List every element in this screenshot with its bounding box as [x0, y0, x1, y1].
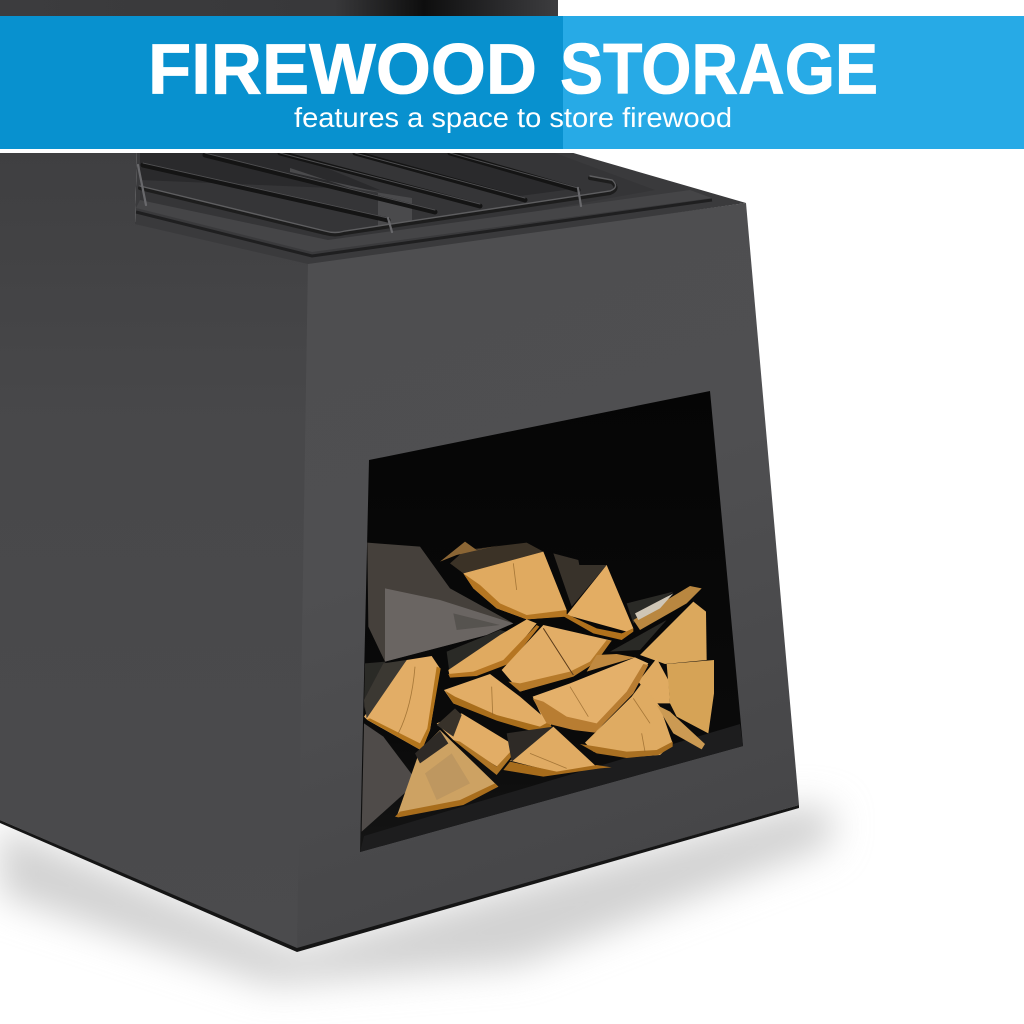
opening floor [360, 724, 743, 852]
gray bark wedge lower left [362, 723, 417, 832]
gray bark log [367, 543, 513, 662]
front face of pit [297, 203, 799, 949]
tray shadow band [140, 153, 580, 196]
log right upper wedge [633, 586, 707, 664]
log bottom left stained [395, 730, 498, 817]
left face of pit [0, 150, 309, 949]
title banner [0, 16, 1024, 153]
top surface [135, 150, 746, 264]
log lower right [580, 683, 705, 758]
log small right centre [638, 658, 670, 703]
fire pit body [0, 0, 799, 952]
log middle wide [502, 625, 612, 692]
ground shadow [0, 805, 835, 985]
subheading: features a space to store firewood [294, 102, 732, 133]
dark bark behind [364, 592, 673, 720]
white divider below banner [0, 149, 1024, 153]
firewood storage opening [360, 391, 743, 852]
log top centre [440, 542, 567, 619]
log bottom wedge [503, 727, 612, 777]
log centre bottom [437, 708, 517, 775]
banner left segment [0, 16, 563, 149]
log top right [553, 553, 633, 640]
center bracket [290, 168, 412, 228]
log right wedge [667, 660, 714, 733]
opening interior [360, 391, 743, 852]
banner right segment [560, 16, 1024, 149]
heading: STORAGE [560, 30, 878, 110]
recessed tray [140, 153, 655, 250]
stacked firewood logs [362, 542, 714, 832]
log middle wedge left [448, 619, 539, 678]
heading: FIREWOOD [148, 30, 537, 110]
log left upright [364, 656, 441, 751]
base edge shadow [0, 805, 799, 952]
wood grain lines [398, 563, 650, 768]
log centre right bright [533, 654, 648, 733]
tray lip [136, 190, 712, 252]
rack rods [138, 153, 616, 234]
grill top with rack [135, 150, 746, 264]
log centre lower long [444, 674, 552, 734]
upper chimney above banner [0, 0, 558, 18]
